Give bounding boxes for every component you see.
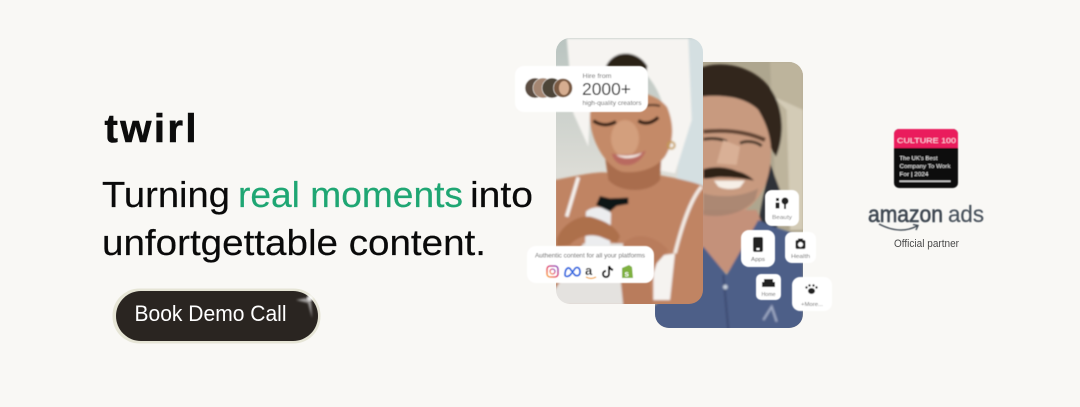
tile: more [792,277,832,311]
creator avatars [525,78,572,98]
card: hire from 2000+ creators: high-quality creators [582,101,642,107]
icon: shopify: s [624,270,630,278]
card: authentic content platforms: Authentic content for all your platforms [535,254,645,260]
tile: beauty: Beauty [772,215,792,221]
badge: culture 100: CULTURE 100 [897,136,956,145]
icon: meta [565,268,580,276]
tile: apps: Apps [751,257,765,263]
headline: real moments [238,174,463,215]
logo: amazon ads [868,201,984,230]
tile: health: Health [791,254,810,260]
card: hire from 2000+ creators: 2000+ [582,79,631,99]
logo: amazon ads: ads [948,201,984,227]
badge: culture 100: For | 2024 [900,172,928,178]
card: authentic content platforms [527,246,654,283]
icon: tiktok [603,266,613,277]
button: book demo call: Book Demo Call [134,301,286,326]
headline: unfortgettable content. [102,222,486,263]
badge: culture 100: Company To Work [900,164,951,170]
tile: health [785,232,816,263]
badge: culture 100: The UK's Best [900,156,938,162]
twirl logo: twirl [104,107,196,151]
tile: apps [741,230,775,267]
card: hire from 2000+ creators: Hire from [582,74,612,80]
tile: beauty [765,190,799,226]
headline: into [470,174,533,215]
photo: man on video call [653,62,803,330]
headline [102,174,533,263]
icon: amazon: a [585,263,593,278]
badge: culture 100 [894,129,958,188]
photo: woman with towel and bottle [555,38,707,307]
card: hire from 2000+ creators [515,66,648,112]
text: official partner: Official partner [894,238,959,250]
tile: home [756,274,781,300]
tile: more: +More... [801,302,824,308]
headline: Turning [102,174,230,215]
tile: home: Home [762,292,776,298]
logo: amazon ads: amazon [868,201,943,227]
icon: instagram [547,266,558,277]
button: book demo call [112,288,320,344]
